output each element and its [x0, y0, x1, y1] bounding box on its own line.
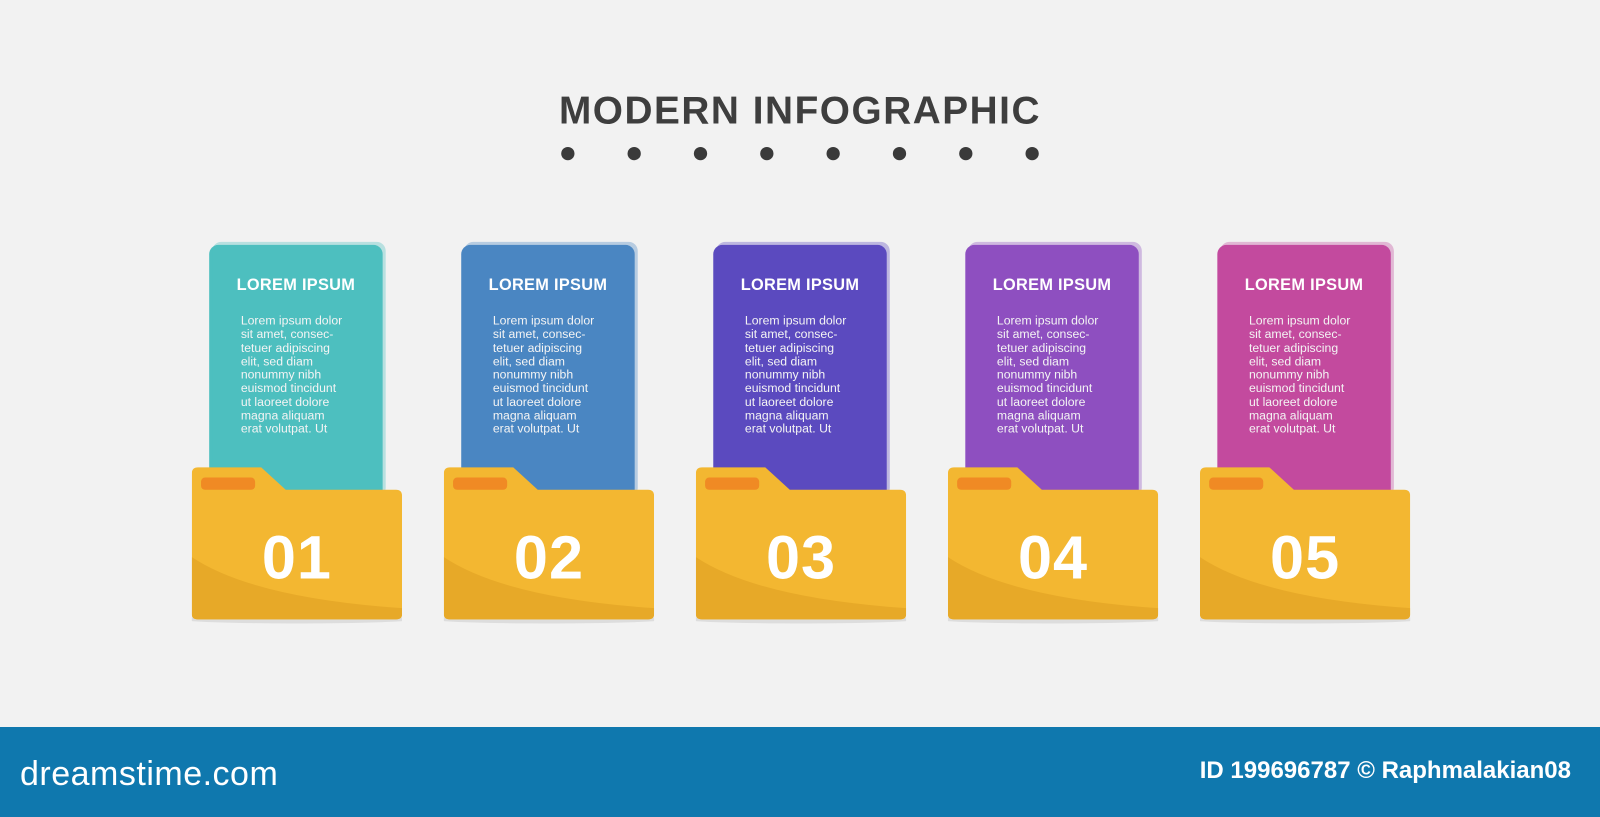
card 04 — [965, 245, 1139, 500]
card 03: nonummy nibh — [745, 368, 825, 382]
card 02: erat volutpat. Ut — [493, 422, 579, 436]
folder 03 — [696, 467, 906, 624]
card 04: erat volutpat. Ut — [997, 422, 1083, 436]
card 03: elit, sed diam — [745, 354, 817, 368]
card 02: euismod tincidunt — [493, 381, 588, 395]
dots row — [561, 147, 1039, 160]
card 02: elit, sed diam — [493, 354, 565, 368]
card 02: magna aliquam — [493, 408, 577, 423]
card 02: nonummy nibh — [493, 368, 573, 382]
folder 01 — [192, 467, 402, 624]
footer bar — [0, 727, 1600, 817]
card 05 — [1217, 245, 1391, 500]
footer logo: dreamstime.com — [20, 755, 278, 793]
card 03: LOREM IPSUM — [741, 277, 859, 294]
card 02: Lorem ipsum dolor — [493, 313, 594, 328]
card 02: ut laoreet dolore — [493, 395, 581, 409]
card 02: tetuer adipiscing — [493, 340, 582, 355]
footer credit: ID 199696787 © Raphmalakian08 — [1200, 757, 1571, 784]
card 03: erat volutpat. Ut — [745, 422, 831, 436]
card 03: tetuer adipiscing — [745, 340, 834, 355]
card 02: LOREM IPSUM — [489, 277, 607, 294]
card 03: ut laoreet dolore — [745, 395, 833, 409]
number 02: 02 — [514, 523, 584, 592]
card 04: sit amet, consec- — [997, 327, 1089, 341]
card 01: LOREM IPSUM — [237, 277, 355, 294]
card 05: Lorem ipsum dolor — [1249, 313, 1350, 328]
card 01: erat volutpat. Ut — [241, 422, 327, 436]
step 01 — [192, 242, 402, 624]
number 03: 03 — [766, 523, 836, 592]
card 03 — [713, 245, 887, 500]
card 05: LOREM IPSUM — [1245, 277, 1363, 294]
card 04: LOREM IPSUM — [993, 277, 1111, 294]
card 05: euismod tincidunt — [1249, 381, 1344, 395]
card 04: ut laoreet dolore — [997, 395, 1085, 409]
card 04: elit, sed diam — [997, 354, 1069, 368]
card 05: ut laoreet dolore — [1249, 395, 1337, 409]
card 01: ut laoreet dolore — [241, 395, 329, 409]
card 05: elit, sed diam — [1249, 354, 1321, 368]
folder 04 — [948, 467, 1158, 624]
step 03 — [696, 242, 906, 624]
card 05: nonummy nibh — [1249, 368, 1329, 382]
step 02 — [444, 242, 654, 624]
number 01: 01 — [262, 523, 332, 592]
number 04: 04 — [1018, 523, 1088, 592]
card 04: magna aliquam — [997, 408, 1081, 423]
card 01: elit, sed diam — [241, 354, 313, 368]
card 05: sit amet, consec- — [1249, 327, 1342, 341]
card 01: tetuer adipiscing — [241, 340, 330, 355]
card 01: magna aliquam — [241, 408, 325, 423]
card 01: nonummy nibh — [241, 368, 321, 382]
card 01: sit amet, consec- — [241, 327, 333, 341]
card 02: sit amet, consec- — [493, 327, 585, 341]
card 04: nonummy nibh — [997, 368, 1077, 382]
card 03: euismod tincidunt — [745, 381, 840, 395]
card 03: Lorem ipsum dolor — [745, 313, 846, 328]
card 04: Lorem ipsum dolor — [997, 313, 1098, 328]
title: MODERN INFOGRAPHIC — [559, 90, 1041, 133]
card 05: tetuer adipiscing — [1249, 340, 1338, 355]
step 04 — [948, 242, 1158, 624]
card 04: tetuer adipiscing — [997, 340, 1086, 355]
step 05 — [1200, 242, 1410, 624]
card 01: euismod tincidunt — [241, 381, 336, 395]
card 03: magna aliquam — [745, 408, 829, 423]
card 01: Lorem ipsum dolor — [241, 313, 342, 328]
card 03: sit amet, consec- — [745, 327, 837, 341]
card 05: magna aliquam — [1249, 408, 1333, 423]
number 05: 05 — [1270, 523, 1340, 592]
card 05: erat volutpat. Ut — [1249, 422, 1335, 436]
card 02 — [461, 245, 635, 500]
folder 05 — [1200, 467, 1410, 624]
card 01 — [209, 245, 383, 500]
card 04: euismod tincidunt — [997, 381, 1092, 395]
folder 02 — [444, 467, 654, 624]
